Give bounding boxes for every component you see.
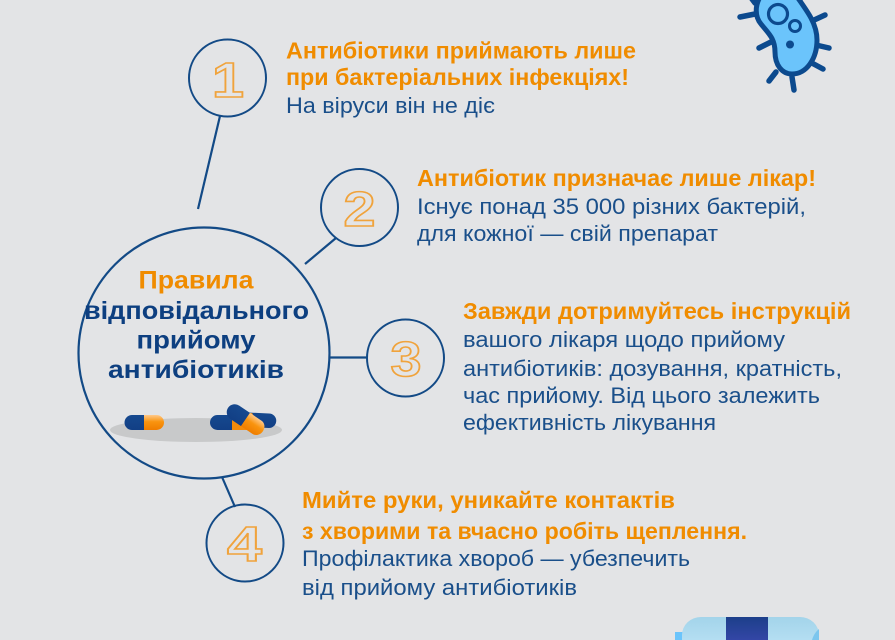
text 3 [463,298,851,435]
text 3: вашого лікаря щодо прийому [463,327,785,352]
text 1: На віруси він не діє [286,93,495,118]
item 3 [367,298,851,435]
text 4: Мийте руки, уникайте контактів [302,487,675,513]
item 4 [206,487,747,600]
number circle 3: 3 [390,333,422,387]
number circle 3 [367,320,444,396]
icon: pills [110,401,282,442]
number circle 2: 2 [344,183,376,237]
text 2: Антибіотик призначає лише лікар! [417,165,816,191]
text 1: Антибіотики приймають лише [286,38,636,64]
text 2: для кожної — свій препарат [417,221,718,246]
item 1 [189,38,636,118]
text 2 [417,165,816,246]
number circle 4 [206,504,284,582]
item 2 [321,165,816,246]
title [84,266,309,384]
central circle [78,228,330,478]
title: прийому [136,326,256,354]
number circle 4: 4 [227,518,262,572]
number circle 1: 1 [212,54,244,108]
number circle 1 [189,40,266,116]
text 3: антибіотиків: дозування, кратність, [463,356,842,381]
title: Правила [138,266,255,294]
text 1: при бактеріальних інфекціях! [286,64,629,90]
number circle 2 [321,169,398,246]
text 4: від прийому антибіотиків [302,575,577,600]
title: антибіотиків [108,356,284,384]
text 1 [286,38,636,118]
text 3: ефективність лікування [463,410,716,435]
text 3: час прийому. Від цього залежить [463,383,820,408]
icon: capsule bottle top [675,617,819,640]
text 4: Профілактика хвороб — убезпечить [302,546,690,571]
text 3: Завжди дотримуйтесь інструкцій [463,298,851,324]
icon: capsule pile [210,401,276,438]
connector lines [198,116,367,507]
text 4: з хворими та вчасно робіть щеплення. [302,518,747,544]
icon: single capsule [124,415,164,430]
text 4 [302,487,747,600]
icon: bacterium [740,0,829,90]
text 2: Існує понад 35 000 різних бактерій, [417,194,806,219]
title: відповідального [84,297,309,325]
